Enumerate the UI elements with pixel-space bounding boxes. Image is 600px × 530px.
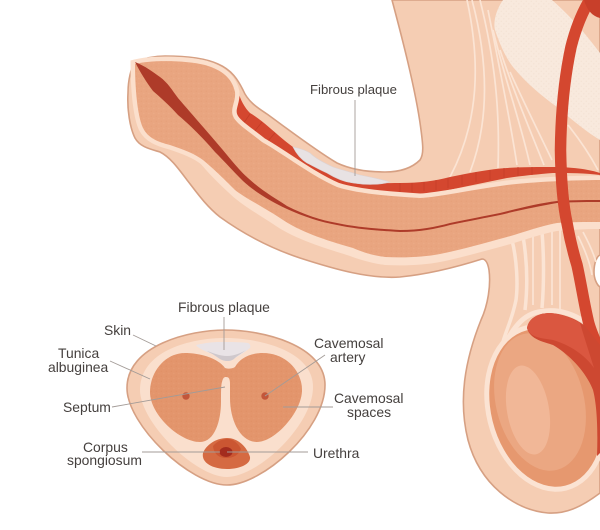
label: cavernosal spaces bbox=[283, 390, 403, 420]
label: tunica albuginea: albuginea bbox=[48, 359, 109, 375]
label: urethra: Urethra bbox=[313, 445, 360, 461]
label: cavernosal spaces: Cavemosal bbox=[334, 390, 403, 406]
label: corpus spongiosum: Corpus bbox=[83, 439, 128, 455]
label: urethra bbox=[227, 445, 360, 461]
artery branch at top right bbox=[584, 0, 600, 18]
label: septum: Septum bbox=[63, 399, 111, 415]
body and shaft skin bbox=[128, 0, 600, 513]
skin layer bbox=[127, 330, 325, 485]
testis lining bbox=[467, 311, 600, 505]
panel: cross-section bbox=[48, 299, 403, 485]
artery bbox=[560, 0, 600, 352]
urethra section bbox=[220, 447, 232, 457]
testis bbox=[473, 317, 600, 499]
label: tunica albuginea bbox=[48, 345, 150, 379]
epididymis bbox=[527, 313, 600, 456]
label: fibrous plaque on shaft: Fibrous plaque bbox=[310, 82, 397, 97]
label: fibrous plaque bbox=[178, 299, 270, 350]
label: corpus spongiosum: spongiosum bbox=[67, 452, 142, 468]
corpus spongiosum bbox=[203, 438, 250, 469]
label: skin bbox=[104, 322, 156, 346]
fatty pad bbox=[494, 0, 600, 140]
red tunica band bbox=[234, 90, 600, 200]
corpus cavernosum with pale border bbox=[135, 61, 600, 257]
label: cavernosal spaces: spaces bbox=[347, 404, 391, 420]
label: skin: Skin bbox=[104, 322, 131, 338]
ligament fibers bbox=[450, 0, 598, 345]
label: cavernosal artery: Cavemosal bbox=[314, 335, 383, 351]
cross-section plaque bbox=[196, 342, 250, 361]
lower pale band of shaft bbox=[190, 150, 600, 265]
label: tunica albuginea: Tunica bbox=[58, 345, 99, 361]
label: fibrous plaque on shaft bbox=[310, 82, 397, 176]
label: corpus spongiosum bbox=[67, 439, 220, 468]
label: fibrous plaque: Fibrous plaque bbox=[178, 299, 270, 315]
cavernosal lobes and septum bbox=[150, 353, 302, 442]
pale arch over epididymis bbox=[503, 311, 585, 347]
label: cavernosal artery: artery bbox=[330, 349, 366, 365]
plaque shadow bbox=[207, 350, 246, 361]
label: septum bbox=[63, 387, 225, 415]
tunica albuginea bbox=[140, 338, 313, 477]
urethra bbox=[135, 62, 600, 232]
cavernosal arteries bbox=[182, 392, 269, 400]
label: cavernosal artery bbox=[265, 335, 383, 396]
fibrous plaque bbox=[293, 147, 390, 184]
